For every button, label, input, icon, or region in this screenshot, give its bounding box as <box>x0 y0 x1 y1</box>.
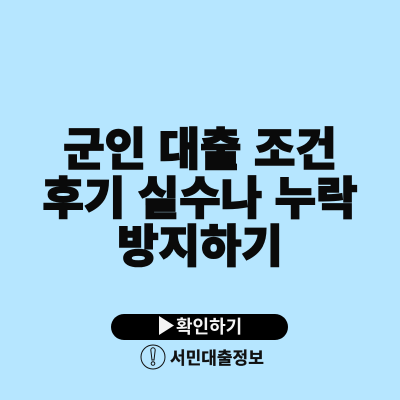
brand logo <box>140 344 264 370</box>
button label: 확인하기 <box>176 313 242 339</box>
title <box>42 113 358 275</box>
title line 3: 방지하기 <box>117 210 283 275</box>
button: confirm <box>111 314 288 340</box>
icon: exclamation circle <box>140 344 166 370</box>
brand name: 서민대출정보 <box>170 344 264 369</box>
title line 2: 후기 실수나 누락 <box>42 162 358 226</box>
icon: play triangle <box>159 316 174 335</box>
title line 1: 군인 대출 조건 <box>63 113 337 178</box>
